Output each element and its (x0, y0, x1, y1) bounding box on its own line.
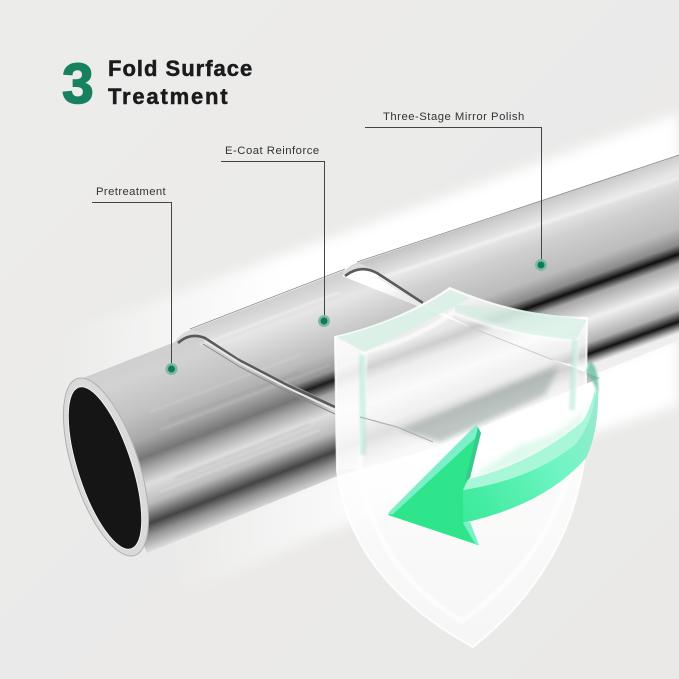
infographic canvas (62, 60, 679, 648)
tube top edge lines (190, 155, 679, 329)
title number: 3 (62, 52, 94, 116)
shield green top bevel (337, 290, 470, 352)
leader line (221, 162, 324, 321)
title line 1: Fold Surface (108, 56, 253, 81)
tube end rim (46, 368, 166, 566)
shield left side face (335, 337, 365, 470)
arrow tail highlight (463, 385, 596, 490)
light band below the tube (150, 335, 679, 592)
tube section: pretreatment (78, 330, 440, 553)
label: Pretreatment (96, 186, 167, 198)
seen-through fold (360, 417, 433, 442)
arrow head right bevel (465, 427, 481, 482)
arrow head (388, 427, 478, 545)
light band above the tube (60, 113, 679, 400)
callout: pretreatment (92, 186, 178, 375)
shield inner outline (360, 312, 576, 621)
tube opening (53, 379, 157, 557)
lip highlights (175, 263, 373, 342)
tube (46, 155, 679, 566)
title (108, 56, 253, 109)
arrow back end (586, 360, 598, 395)
callout: e-coat reinforce (221, 145, 330, 327)
tube section: mirror polish (342, 155, 679, 372)
arrow head bevel (388, 425, 481, 545)
leader line (365, 128, 542, 265)
shield body (335, 288, 587, 647)
label: Three-Stage Mirror Polish (383, 111, 525, 123)
callout: three-stage mirror polish (365, 111, 547, 271)
marker dot (318, 315, 330, 327)
brushed texture (150, 178, 679, 492)
tube section: e-coat (175, 270, 600, 444)
label: E-Coat Reinforce (225, 145, 320, 157)
seen-through band (400, 364, 560, 442)
title line 2: Treatment (108, 84, 229, 109)
fold edge 2 (345, 269, 423, 303)
shield green side edges (362, 340, 575, 455)
arrow tail (463, 380, 598, 523)
marker dot (166, 363, 178, 375)
marker dot (535, 259, 547, 271)
leader line (92, 202, 172, 369)
arrow fading upper arc (470, 392, 592, 478)
fold edge 1 (178, 336, 335, 407)
arrow (388, 360, 598, 545)
shield (335, 288, 587, 647)
